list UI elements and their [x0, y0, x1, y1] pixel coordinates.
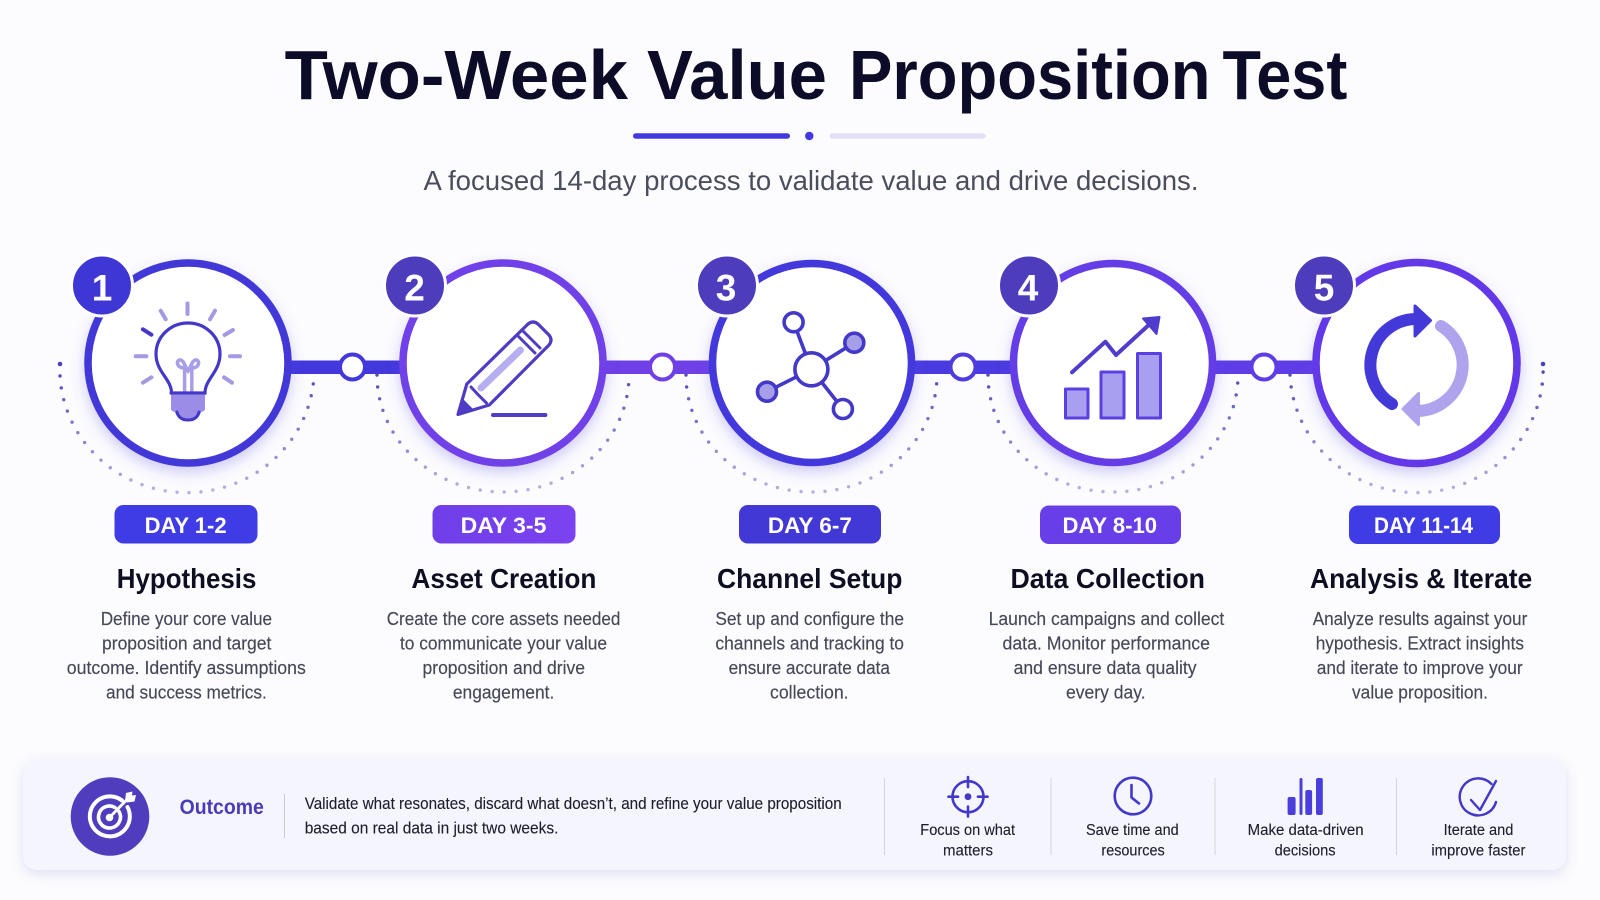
number badge 1	[72, 255, 132, 316]
description 2: to communicate your value	[400, 633, 607, 653]
ring 3	[712, 264, 912, 462]
timeline connectors	[285, 354, 1318, 380]
icon: check circle	[1460, 778, 1496, 815]
label: resources	[1101, 842, 1165, 860]
description 5: and iterate to improve your	[1317, 658, 1523, 678]
icon: target	[71, 777, 149, 856]
day pill 1	[114, 505, 258, 544]
number badge 4: 4	[1018, 268, 1039, 308]
label: Make data-driven	[1248, 822, 1364, 839]
title divider	[633, 132, 986, 140]
icon: light bulb	[136, 304, 240, 420]
number badge 4	[998, 255, 1060, 316]
description 4	[989, 609, 1224, 702]
number badge 5: 5	[1314, 268, 1334, 308]
description 1: and success metrics.	[106, 682, 267, 702]
benefit: data-driven decisions	[1248, 778, 1364, 860]
description 2	[387, 609, 620, 702]
label: Focus on what	[920, 822, 1016, 839]
title: Two-Week	[285, 36, 628, 114]
subtitle: A focused 14-day process to validate value and drive decisions.	[424, 165, 1198, 196]
label: Save time and	[1086, 822, 1179, 839]
heading: analysis and iterate: Analysis & Iterate	[1310, 563, 1532, 594]
description 2: Create the core assets needed	[387, 609, 620, 629]
panel: outcome	[23, 759, 1566, 870]
ring 2	[403, 263, 603, 463]
description 1: Define your core value	[101, 609, 272, 629]
step 2: asset creation	[384, 255, 620, 702]
step 4: data collection	[989, 255, 1224, 702]
icon: crosshair	[948, 777, 988, 816]
day pill 5: DAY 11-14	[1374, 513, 1473, 538]
dotted arcs	[58, 362, 1545, 493]
number badge 2	[384, 255, 446, 316]
number badge 1: 1	[92, 268, 112, 308]
day pill 4	[1040, 506, 1181, 544]
description 4: and ensure data quality	[1014, 658, 1197, 678]
label: Iterate and	[1444, 822, 1513, 839]
step 5: analysis and iterate	[1294, 255, 1532, 702]
outcome text: based on real data in just two weeks.	[305, 819, 558, 837]
title: Proposition	[849, 36, 1210, 114]
day pill 4: DAY 8-10	[1062, 513, 1157, 538]
description 4: every day.	[1066, 682, 1146, 702]
label	[1248, 822, 1364, 860]
step 1: hypothesis	[67, 255, 306, 702]
day pill 5	[1349, 506, 1500, 544]
ring 5	[1316, 262, 1517, 464]
description 5: value proposition.	[1352, 682, 1488, 702]
outcome text: Validate what resonates, discard what doesn’t, and refine your value proposition	[305, 795, 842, 813]
description 1: proposition and target	[102, 633, 271, 653]
label	[920, 822, 1016, 860]
title: Value	[647, 36, 827, 114]
title	[285, 36, 1347, 114]
icon: pencil	[458, 322, 551, 415]
number badge 2: 2	[404, 268, 425, 308]
description 4: Launch campaigns and collect	[989, 609, 1224, 629]
icon: network nodes	[758, 313, 864, 418]
description 1	[67, 609, 306, 702]
description 4: data. Monitor performance	[1002, 633, 1210, 653]
description 3	[715, 609, 904, 702]
label: improve faster	[1431, 842, 1525, 860]
icon: bars	[1288, 778, 1323, 815]
description 3: ensure accurate data	[729, 658, 891, 678]
description 3: channels and tracking to	[715, 633, 904, 653]
benefit: focus	[920, 777, 1016, 860]
description 5	[1313, 609, 1527, 702]
label	[1431, 822, 1525, 860]
ring 1	[88, 263, 288, 463]
panel background	[23, 759, 1566, 870]
icon: iteration cycle arrows	[1370, 306, 1463, 424]
number badge 3	[696, 255, 758, 316]
day pill 3	[739, 505, 881, 544]
ring 4	[1014, 264, 1212, 462]
benefit: iterate faster	[1431, 778, 1525, 860]
title: Test	[1222, 36, 1347, 114]
description 2: proposition and drive	[422, 658, 585, 678]
benefit: save time	[1086, 778, 1179, 860]
day pill 2: DAY 3-5	[461, 513, 546, 538]
description 3: Set up and configure the	[715, 609, 904, 629]
description 5: Analyze results against your	[1313, 609, 1527, 629]
description 1: outcome. Identify assumptions	[67, 658, 306, 678]
heading: channel setup: Channel Setup	[717, 563, 902, 594]
day pill 1: DAY 1-2	[145, 513, 227, 538]
heading: hypothesis: Hypothesis	[117, 563, 256, 594]
heading: data collection: Data Collection	[1010, 563, 1205, 594]
label	[1086, 822, 1179, 860]
description 5: hypothesis. Extract insights	[1316, 633, 1524, 653]
number badge 3: 3	[716, 268, 736, 308]
day pill 3: DAY 6-7	[768, 513, 852, 538]
outcome text	[305, 795, 842, 837]
description 3: collection.	[770, 682, 849, 702]
heading: asset creation: Asset Creation	[411, 563, 596, 594]
label: decisions	[1275, 842, 1336, 860]
label: matters	[943, 842, 993, 860]
number badge 5	[1294, 255, 1354, 316]
outcome label: Outcome	[180, 796, 264, 819]
description 2: engagement.	[453, 682, 554, 702]
icon: clock	[1115, 778, 1151, 814]
day pill 2	[432, 505, 576, 544]
step 3: channel setup	[696, 255, 912, 702]
icon: rising bar chart	[1066, 317, 1160, 418]
